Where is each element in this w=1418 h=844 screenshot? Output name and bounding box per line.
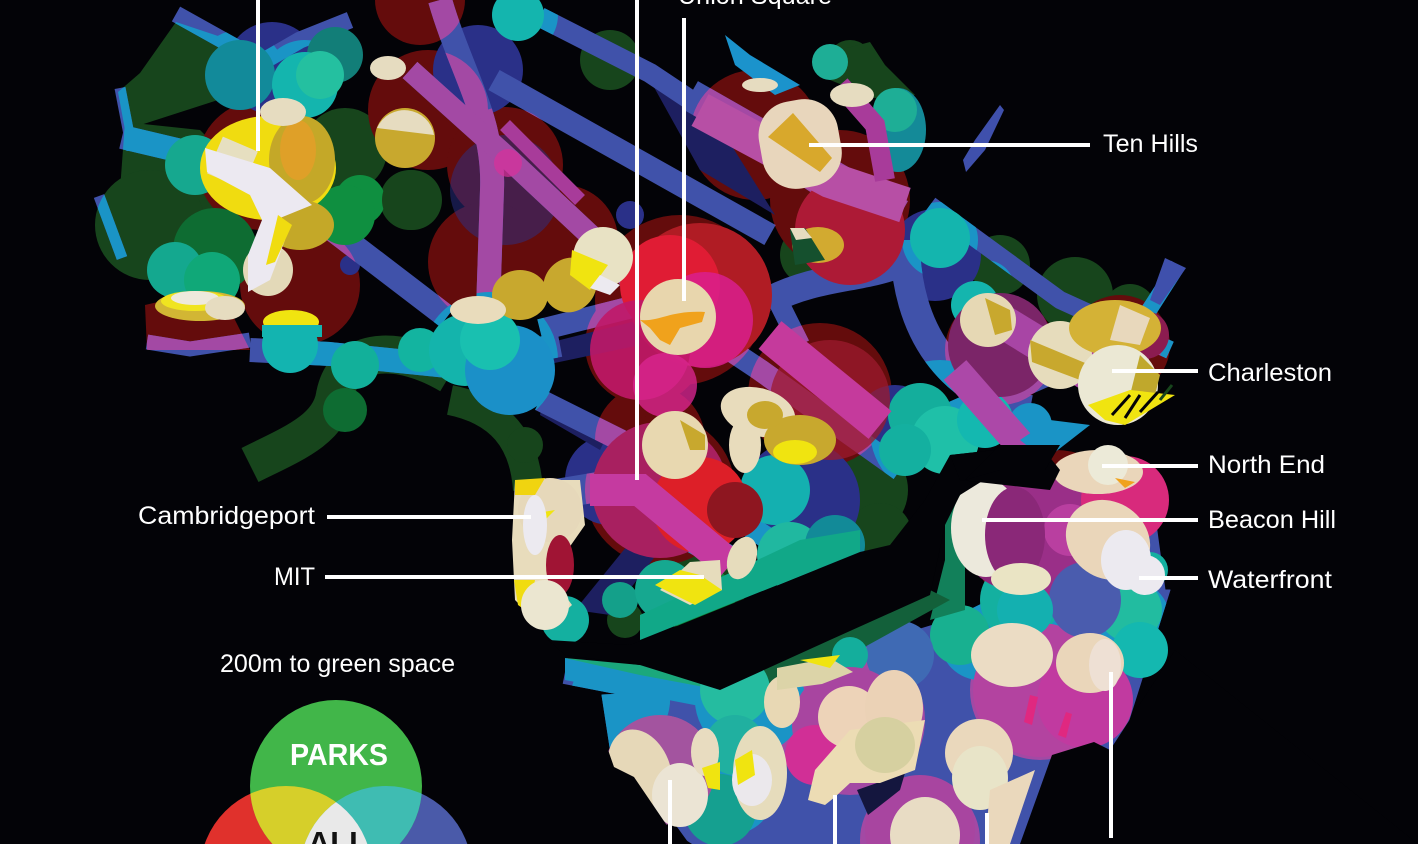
layer: Union Square red cluster (494, 85, 905, 565)
legend heading: 200m to green space (220, 650, 455, 678)
north-east blue road stub (1150, 258, 1186, 305)
layer: central tan and cream circles (370, 56, 836, 479)
callout: top-left neighbourhood line (256, 0, 260, 151)
callout: MIT (274, 563, 704, 591)
layer: streets over red (99, 0, 1178, 844)
layer: streets over green (99, 0, 1178, 844)
layer: south cream circles (596, 623, 1124, 844)
callout: Waterfront: Waterfront (1208, 566, 1332, 594)
layer: Charleston cream circles (960, 293, 1175, 425)
callout: Union Square (678, 0, 832, 301)
layer: Beacon Hill and waterfront cream circles (951, 445, 1166, 596)
layer: Cambridgeport and MIT cream circles (512, 478, 763, 630)
callout: Charleston (1112, 359, 1332, 387)
layer: west yellow and white overlap (155, 98, 336, 337)
callout: Waterfront (1139, 566, 1332, 594)
layer: navy coverage (226, 22, 981, 615)
callout: North End (1102, 451, 1325, 479)
callout: MIT: MIT (274, 563, 315, 591)
callout: Ten Hills (809, 130, 1198, 158)
callout: Ten Hills: Ten Hills (1103, 130, 1198, 158)
layer: east green and cyan circles (541, 35, 1052, 644)
layer: west green and cyan circles (147, 0, 555, 463)
callout: North End: North End (1208, 451, 1325, 479)
layer: south green and cyan circles (565, 490, 1168, 844)
callout: Cambridgeport (138, 502, 531, 530)
layer: Beacon Hill and Charleston purple (948, 293, 1169, 638)
callout: Charleston: Charleston (1208, 359, 1332, 387)
callout lines: south neighbourhoods (668, 672, 1113, 844)
layer: dark green parks coverage (95, 22, 1156, 638)
river and harbour cut-outs (548, 445, 1418, 844)
callout: Cambridgeport: Cambridgeport (138, 502, 315, 530)
layer: south magenta circles (605, 623, 1133, 844)
accessibility map (94, 0, 1186, 844)
layer: streets in blue (99, 0, 1178, 844)
Ten Hills blue sliver (963, 105, 1004, 172)
legend: venn diagram (200, 700, 472, 844)
callout: Beacon Hill: Beacon Hill (1208, 506, 1336, 534)
layer: Ten Hills cream circle (742, 78, 874, 265)
layer: dark red coverage (145, 0, 1170, 620)
legend: venn diagram: PARKS (290, 737, 388, 772)
callout: Beacon Hill (982, 506, 1336, 534)
legend: 200m to green space (200, 650, 472, 844)
callout: long central line (635, 0, 639, 480)
